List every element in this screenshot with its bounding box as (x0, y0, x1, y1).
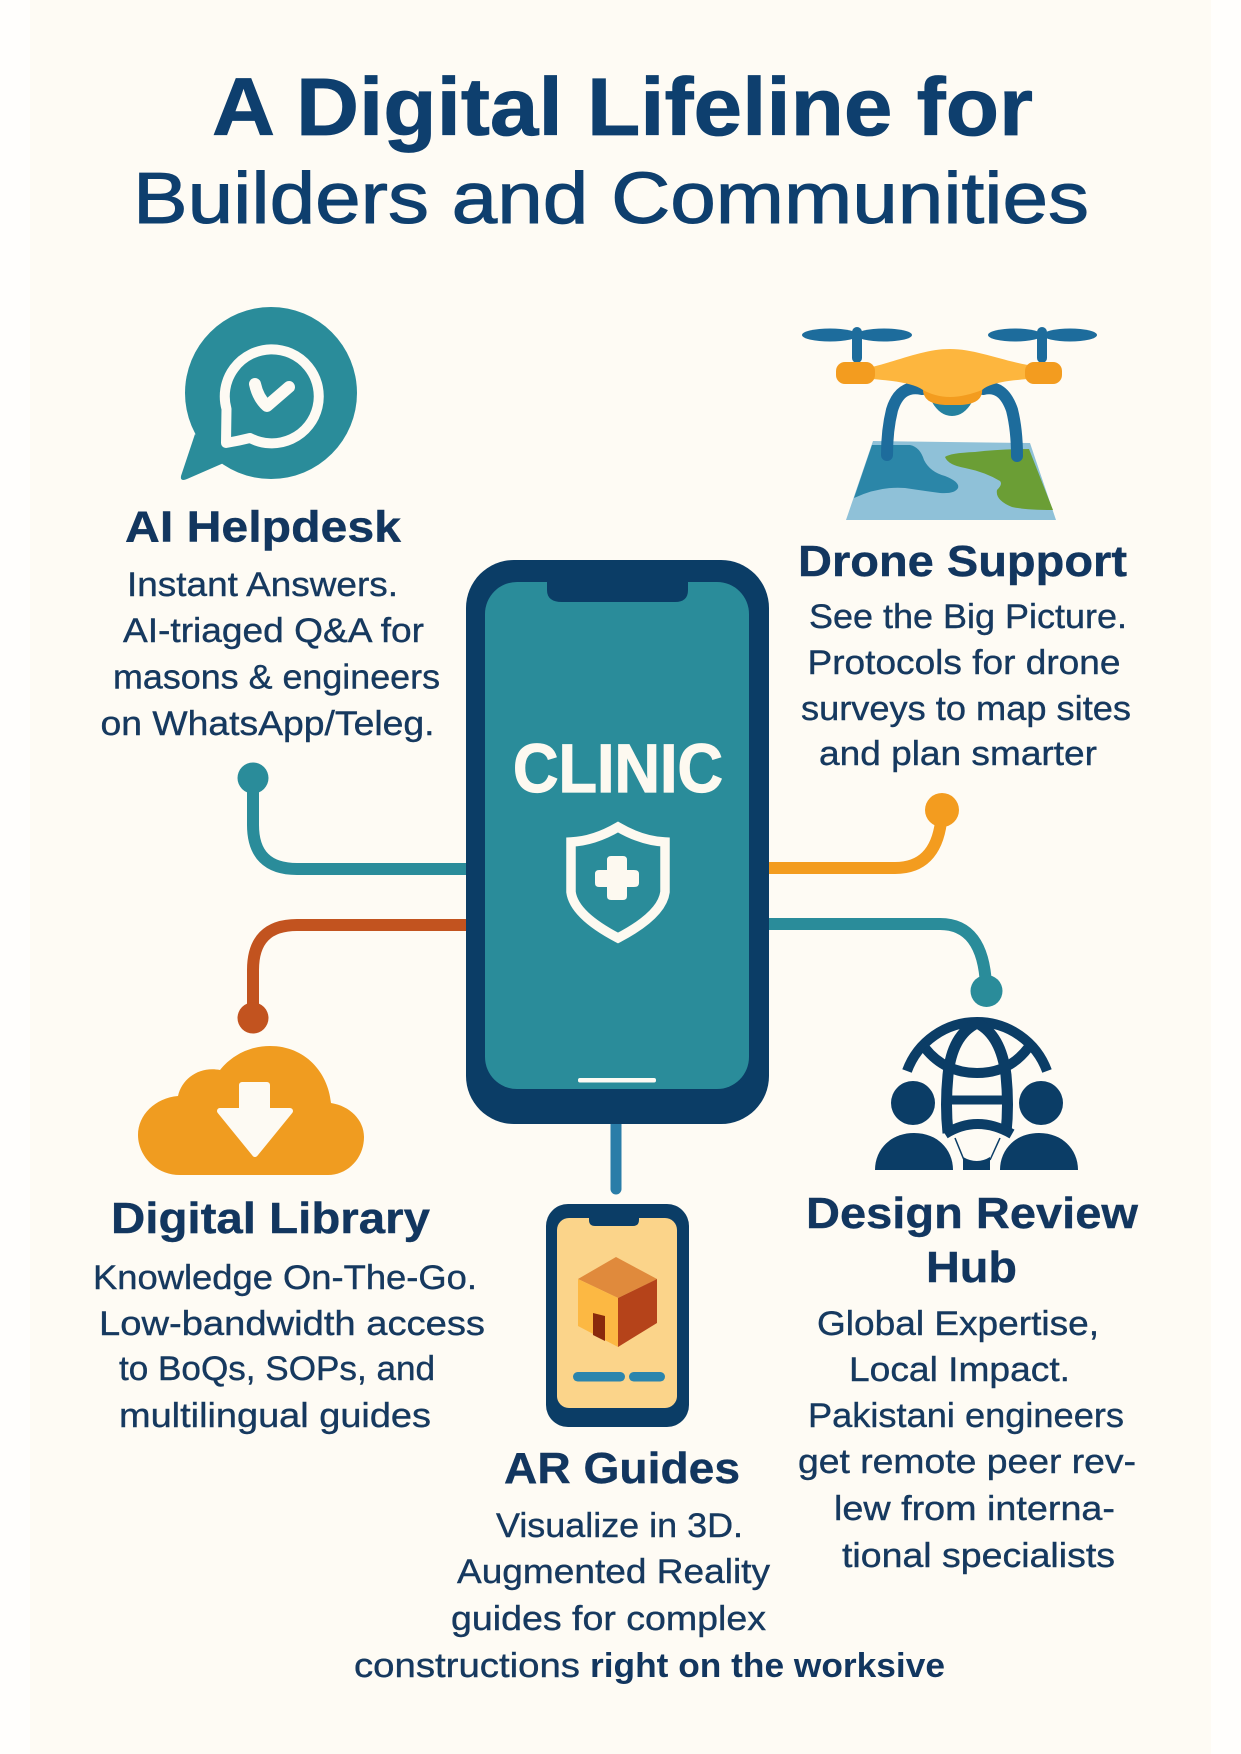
phone screen (485, 582, 749, 1089)
description: to BoQs, SOPs, and (119, 1350, 435, 1388)
description (798, 1305, 1136, 1575)
under body (923, 388, 982, 405)
description: multilingual guides (119, 1397, 431, 1435)
description: on WhatsApp/Teleg. (100, 705, 435, 743)
heading (806, 1189, 1139, 1292)
description: See the Big Picture. (809, 598, 1127, 636)
description (801, 598, 1131, 773)
description: Instant Answers. (127, 566, 398, 604)
title (133, 62, 1089, 239)
title line 2: Builders and Communities (133, 159, 1089, 239)
connector: Digital Library (238, 925, 470, 1034)
description: surveys to map sites (801, 690, 1131, 728)
title line 1: A Digital Lifeline for (212, 62, 1033, 153)
drone body (872, 349, 1028, 397)
description: Visualize in 3D. (496, 1507, 743, 1545)
description: Global Expertise, (817, 1305, 1099, 1343)
description: right on the worksive (590, 1647, 945, 1685)
description: Pakistani engineers (808, 1397, 1124, 1435)
heading: AR Guides (504, 1444, 740, 1493)
description: AI-triaged Q&A for (123, 612, 424, 650)
icon: small phone with 3D cube (546, 1204, 689, 1427)
description: Low-bandwidth access (99, 1305, 485, 1343)
description (93, 1259, 485, 1435)
dome (932, 402, 972, 416)
legs (887, 388, 1017, 456)
CLINIC label: CLINIC (513, 730, 723, 807)
propellers (802, 327, 1097, 363)
description: and plan smarter (819, 735, 1097, 773)
feature: AR Guides (354, 1204, 945, 1685)
motors (836, 362, 875, 384)
feature: Design Review Hub (798, 1022, 1139, 1575)
feature: Drone Support (798, 327, 1131, 773)
notch (547, 580, 688, 602)
icon: shield with cross (571, 827, 665, 938)
icon: globe with two people (875, 1022, 1078, 1170)
description: Knowledge On-The-Go. (93, 1259, 477, 1297)
central phone (466, 560, 769, 1124)
icon: drone over map (802, 327, 1097, 520)
description (100, 566, 440, 743)
icon: chat bubble with check (181, 307, 357, 480)
description: lew from interna- (834, 1490, 1115, 1528)
feature: Digital Library (93, 1046, 485, 1435)
description: Augmented Reality (457, 1553, 770, 1591)
icon: download cloud (138, 1046, 364, 1175)
map (846, 441, 1056, 520)
heading: Drone Support (798, 537, 1127, 586)
heading: Digital Library (111, 1194, 431, 1243)
connector: Drone Support (765, 793, 959, 868)
home bar (578, 1078, 656, 1082)
description: masons & engineers (113, 658, 440, 696)
description: guides for complex (451, 1600, 766, 1638)
description: Local Impact. (849, 1351, 1070, 1389)
description: Protocols for drone (808, 644, 1120, 682)
description: constructions (354, 1647, 580, 1685)
heading: AI Helpdesk (125, 502, 402, 552)
connector: AR Guides (610, 1120, 622, 1189)
connector: AI Helpdesk (238, 762, 470, 869)
heading: Hub (926, 1243, 1017, 1292)
description: get remote peer rev- (798, 1443, 1136, 1481)
feature: AI Helpdesk (100, 307, 440, 743)
description: tional specialists (842, 1537, 1115, 1575)
heading: Design Review (806, 1189, 1139, 1238)
connector: Design Review Hub (765, 924, 1002, 1007)
phone body (466, 560, 769, 1124)
description (354, 1507, 945, 1685)
